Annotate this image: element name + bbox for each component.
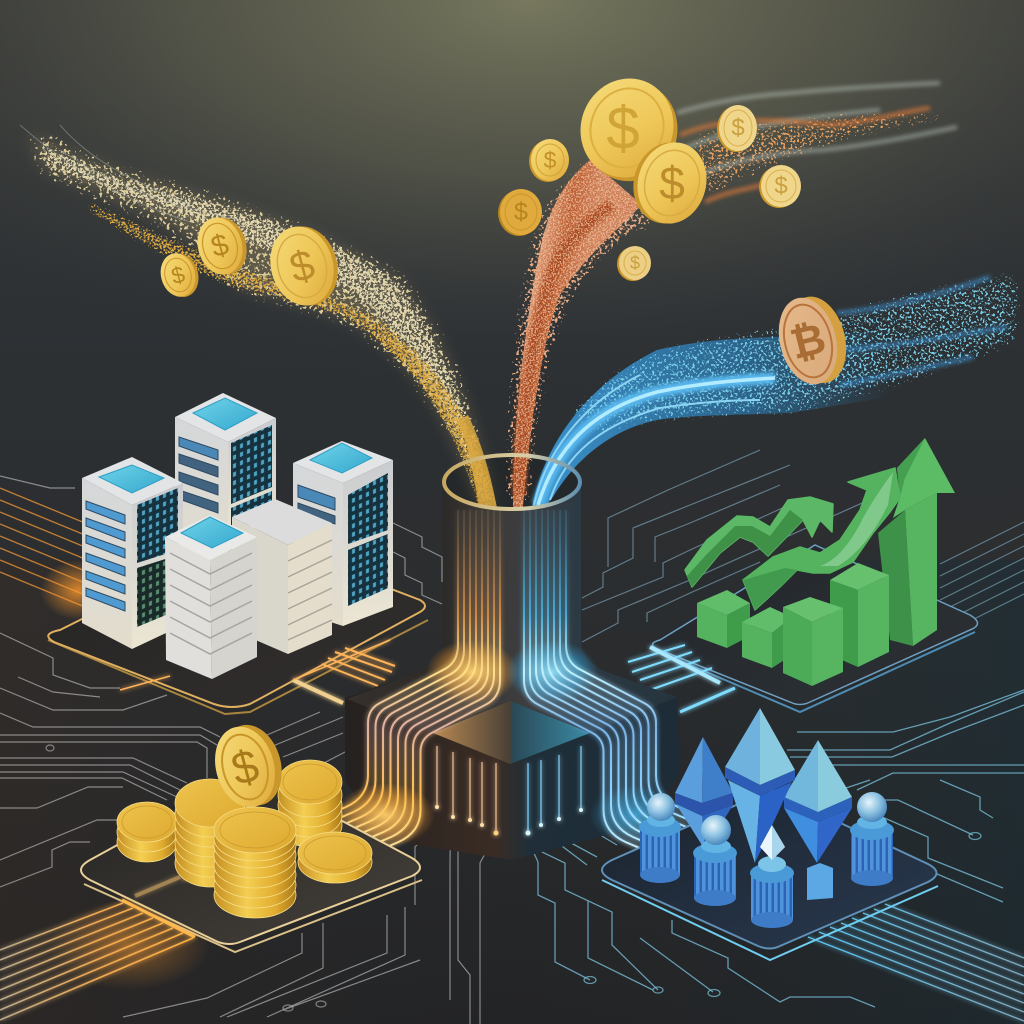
coin: bitcoin: ₿ xyxy=(785,313,831,369)
coin: left large xyxy=(262,218,346,314)
upright dollar coin xyxy=(206,718,290,814)
coin: right a xyxy=(717,105,757,152)
coin: top small b xyxy=(498,189,542,236)
pedestal 4 xyxy=(850,792,894,886)
funnel interior xyxy=(443,455,581,509)
hub glow orange xyxy=(426,640,518,704)
bar 4 xyxy=(830,563,889,667)
hub base walls xyxy=(345,664,680,860)
orange flow lines xyxy=(318,510,500,854)
pedestal 3 xyxy=(750,825,794,928)
coin stacks xyxy=(117,718,372,918)
server tower: back xyxy=(175,393,276,570)
circuit traces: gray left xyxy=(0,476,495,1024)
growth chart xyxy=(685,438,955,686)
trace end terminals right xyxy=(584,832,981,996)
stack: front tall xyxy=(214,807,296,918)
crystal: right xyxy=(784,740,852,863)
circuit glow: lower left xyxy=(50,900,210,990)
coin: left small xyxy=(156,249,203,302)
stream: orange particles xyxy=(503,155,660,507)
small crystal block xyxy=(807,863,833,900)
wall lines orange xyxy=(437,746,496,833)
coin: right b: $ xyxy=(774,172,788,200)
circuit glow: left of servers xyxy=(40,560,116,620)
coin: right a: $ xyxy=(731,114,745,142)
crystal: left xyxy=(675,737,733,850)
circuit traces: lower right blue xyxy=(528,690,1024,1007)
coin: left large: $ xyxy=(285,240,319,292)
coin: left small: $ xyxy=(168,261,188,289)
circuit traces: blue stripes lower right xyxy=(808,904,1024,1021)
bar 1 xyxy=(697,590,750,648)
coin: bitcoin xyxy=(770,289,855,391)
coin: top large xyxy=(566,65,692,194)
coin: top small c xyxy=(617,246,651,281)
server stack: back white xyxy=(232,499,332,654)
coin: right b xyxy=(759,165,801,208)
coin: top front: $ xyxy=(659,157,685,209)
circuit traces: upper left, orange xyxy=(0,488,85,607)
hub lower glow right xyxy=(589,785,681,845)
funnel pipe body xyxy=(347,482,677,763)
panel: server platform xyxy=(48,535,428,714)
stack: left xyxy=(117,802,177,862)
servers xyxy=(82,393,393,679)
ribbon arrow: lower xyxy=(743,468,900,610)
central funnel hub xyxy=(318,455,706,860)
coin: top small c: $ xyxy=(630,253,640,273)
coin: top large: $ xyxy=(606,94,640,162)
crypto crystals xyxy=(639,708,894,928)
coin: left medium xyxy=(191,211,253,281)
upright dollar coin: $ xyxy=(226,739,264,795)
panel: growth chart platform xyxy=(652,545,978,712)
funnel rim xyxy=(444,455,580,509)
coin: left medium: $ xyxy=(208,228,233,264)
coin: top small b: $ xyxy=(514,198,528,226)
blue flow lines xyxy=(524,510,706,854)
panel: crypto platform xyxy=(602,790,938,960)
ribbon arrow: upper xyxy=(685,497,833,587)
pedestal 2 xyxy=(693,815,737,906)
coin: top front xyxy=(624,134,715,232)
circuit traces: right blue xyxy=(582,450,1024,642)
hub glow blue xyxy=(506,640,598,704)
panel: gold coin platform xyxy=(81,772,422,952)
connector: coin platform glow xyxy=(122,872,195,937)
coin: top small a xyxy=(529,139,569,182)
hub lower glow left xyxy=(335,783,435,847)
stream: right wisps xyxy=(677,83,960,205)
stack: right short xyxy=(298,832,372,883)
wall line sparks xyxy=(435,805,583,836)
server stack: front white xyxy=(165,515,257,679)
bar 2 xyxy=(742,607,792,668)
server tower: left xyxy=(82,457,183,649)
stream: gold particles xyxy=(20,115,498,508)
hub centre plate xyxy=(433,701,590,764)
coin: top small a: $ xyxy=(544,147,557,173)
server tower: right xyxy=(293,441,393,626)
circuit traces: orange lower left xyxy=(0,903,193,1020)
stack: middle tall xyxy=(175,779,245,887)
glowing connector: chart to hub xyxy=(628,645,735,712)
flying coins xyxy=(156,65,855,391)
stream: blue particles xyxy=(532,262,1024,507)
bar 3 xyxy=(783,597,843,686)
wall lines blue xyxy=(528,746,581,833)
stack: back right xyxy=(278,760,342,847)
crystal: centre xyxy=(725,708,795,863)
pedestal 1 xyxy=(639,793,681,883)
big green arrow xyxy=(878,438,955,646)
trace end terminals left xyxy=(46,745,326,1011)
glowing connector: servers to hub xyxy=(120,640,395,703)
